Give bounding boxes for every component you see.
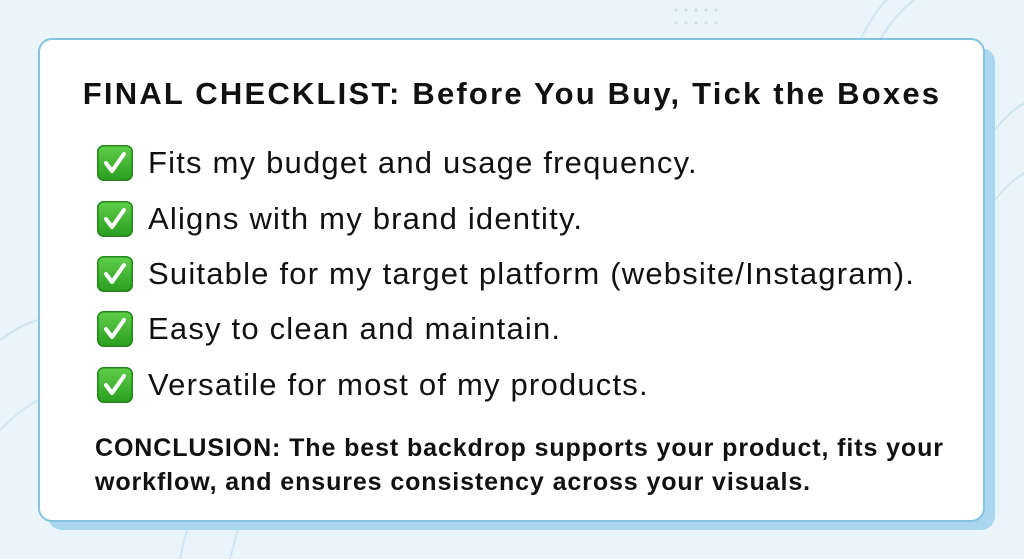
icon: check 2 (97, 201, 133, 237)
icon: check 3 (97, 256, 133, 292)
conclusion (95, 434, 944, 496)
icon: check 1 (97, 145, 133, 181)
title: FINAL CHECKLIST: Before You Buy, Tick the Boxes (83, 76, 941, 111)
card shadow (48, 48, 995, 530)
item 5: Versatile for most of my products. (148, 367, 649, 402)
item 1: Fits my budget and usage frequency. (148, 145, 698, 180)
checklist items (97, 145, 915, 403)
conclusion: workflow, and ensures consistency across your visuals. (95, 468, 811, 496)
icon: check 5 (97, 367, 133, 403)
item 3: Suitable for my target platform (website/Instagram). (148, 256, 915, 291)
item 2: Aligns with my brand identity. (148, 201, 583, 236)
item 4: Easy to clean and maintain. (148, 311, 561, 346)
icon: check 4 (97, 311, 133, 347)
conclusion: CONCLUSION: The best backdrop supports your product, fits your (95, 434, 944, 462)
